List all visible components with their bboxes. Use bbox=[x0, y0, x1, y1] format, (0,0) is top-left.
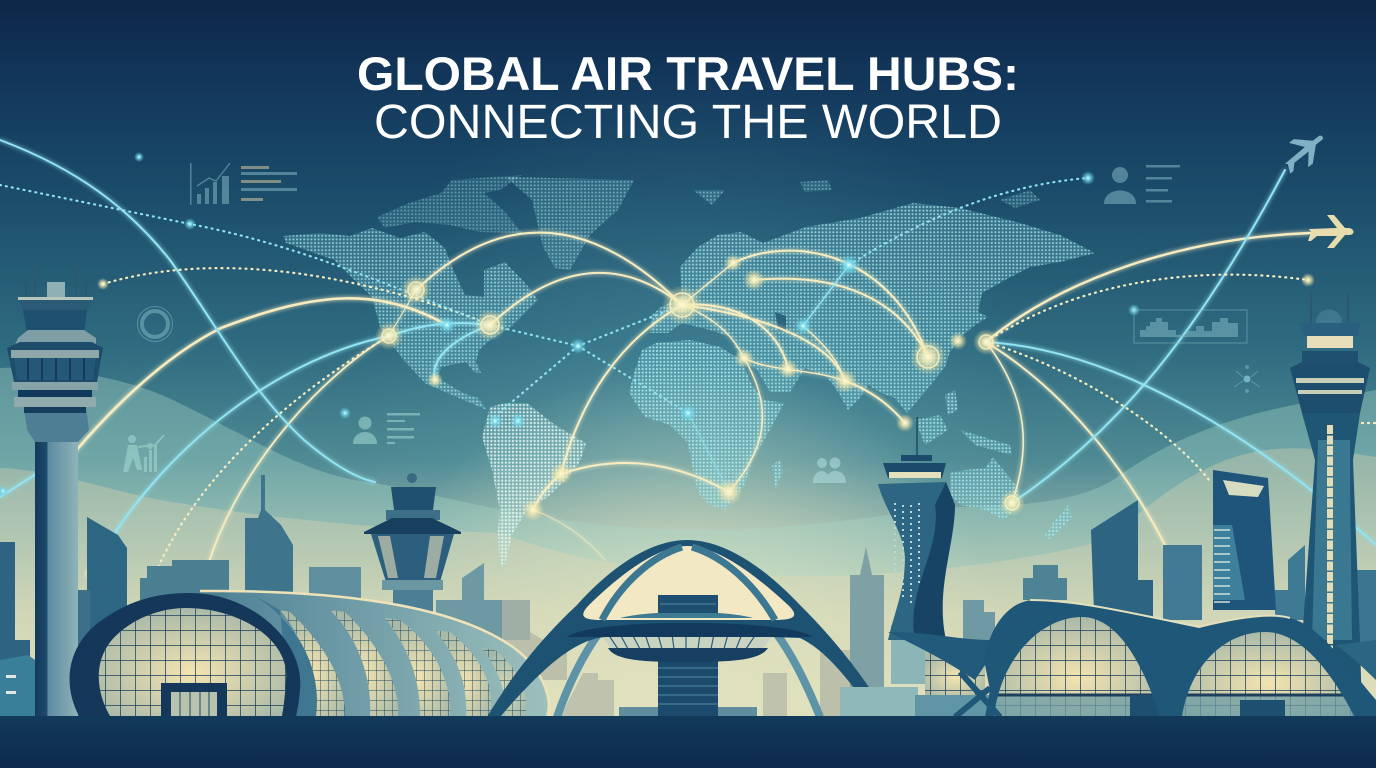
icon: line chart box bbox=[1134, 310, 1247, 343]
dome bbox=[1316, 310, 1342, 323]
antenna bbox=[916, 417, 918, 455]
arched frame bbox=[70, 593, 300, 716]
saucer underside bbox=[608, 648, 768, 662]
gold hub glows bbox=[83, 254, 1315, 605]
continent: Australia and islands bbox=[915, 390, 1072, 540]
plane right bbox=[1308, 215, 1354, 248]
antennas bbox=[26, 262, 86, 300]
upper cab bbox=[407, 473, 417, 483]
lower mullion bands bbox=[990, 694, 1355, 696]
icon: group of people bbox=[813, 458, 846, 483]
top deck bbox=[1300, 323, 1360, 336]
crossing legs bbox=[955, 672, 1374, 717]
second glass arch bbox=[1182, 632, 1353, 717]
central column bbox=[658, 655, 718, 717]
entrance bbox=[161, 683, 227, 716]
title line 2: CONNECTING THE WORLD bbox=[374, 96, 1002, 149]
tower dome bbox=[47, 282, 65, 297]
left control tower bbox=[7, 262, 103, 720]
upper cab bbox=[18, 297, 93, 310]
ground strip bbox=[0, 716, 1376, 768]
left wing roof bbox=[888, 632, 990, 680]
wave roof bbox=[984, 600, 1376, 717]
icon: person card top right bbox=[1104, 165, 1180, 204]
gold hub rings bbox=[382, 282, 1019, 510]
shaft bbox=[393, 585, 433, 625]
left wing glass bbox=[925, 650, 985, 695]
main cab with windows bbox=[7, 342, 103, 382]
continent: Eurasia bbox=[650, 180, 1095, 413]
title bbox=[357, 47, 1019, 149]
icon: life ring bbox=[138, 306, 172, 342]
solid blue routes bbox=[0, 140, 1376, 573]
low side blocks bbox=[619, 707, 757, 717]
right control tower bbox=[1290, 290, 1370, 716]
route nodes bbox=[0, 152, 1315, 605]
deck and outer arch bbox=[487, 540, 888, 717]
base panel bbox=[891, 625, 935, 684]
arch opening bbox=[583, 546, 794, 620]
continent: South America bbox=[482, 403, 586, 567]
far skyline left bbox=[0, 475, 530, 716]
icon: walking people and chart bbox=[123, 435, 164, 472]
solid gold routes bbox=[60, 233, 1310, 598]
low annex bbox=[840, 687, 918, 717]
collar rings bbox=[12, 382, 98, 390]
back arches bbox=[557, 625, 820, 717]
tube glass bays bbox=[280, 610, 526, 716]
saucer window band bbox=[600, 633, 775, 650]
ring band bbox=[255, 596, 317, 716]
saucer roof bbox=[620, 612, 753, 618]
route arcs bbox=[0, 140, 1376, 598]
left wing base bbox=[915, 695, 990, 717]
center right control tower bbox=[878, 417, 955, 684]
mid control tower bbox=[364, 473, 461, 625]
shaft bbox=[1300, 413, 1362, 716]
continent: North America bbox=[283, 175, 538, 410]
main glass arch bbox=[994, 617, 1161, 717]
right terminal bbox=[840, 600, 1376, 717]
icon: network nodes bbox=[1234, 365, 1260, 393]
continent: Greenland and Iceland bbox=[506, 177, 725, 270]
dotted routes bbox=[103, 268, 1376, 587]
ladder windows bbox=[1327, 425, 1333, 650]
title line 1: GLOBAL AIR TRAVEL HUBS: bbox=[357, 47, 1019, 100]
plane upper right bbox=[1275, 124, 1332, 178]
top drum bbox=[658, 595, 718, 613]
antennas bbox=[1311, 290, 1348, 325]
glass front bbox=[99, 608, 286, 716]
skyscraper with window bbox=[1213, 470, 1276, 610]
deck bbox=[567, 623, 813, 637]
theme building terminal bbox=[487, 540, 888, 717]
window cone bbox=[371, 534, 454, 582]
tower shaft bbox=[35, 430, 78, 720]
dotted world map bbox=[283, 175, 1095, 567]
body dots bbox=[895, 503, 919, 605]
small icons bbox=[123, 163, 1260, 483]
icon: bar chart top left bbox=[190, 163, 297, 205]
continent: Africa bbox=[629, 340, 784, 510]
far skyline center bbox=[502, 600, 850, 717]
blue node glows bbox=[0, 152, 1140, 497]
background hills bbox=[0, 368, 1376, 768]
lower teal windows band bbox=[990, 696, 1355, 717]
tube top highlight bbox=[200, 591, 550, 716]
inner arches bbox=[602, 547, 775, 620]
left terminal bbox=[70, 590, 550, 716]
cab bbox=[901, 455, 932, 461]
roof bbox=[364, 518, 461, 534]
icon: person card center left bbox=[353, 413, 420, 444]
twisted body bbox=[878, 482, 955, 640]
left low building bbox=[0, 655, 35, 716]
far skyline right bbox=[850, 470, 1376, 717]
main flared cab bbox=[1290, 362, 1370, 413]
tube body bbox=[200, 590, 548, 716]
